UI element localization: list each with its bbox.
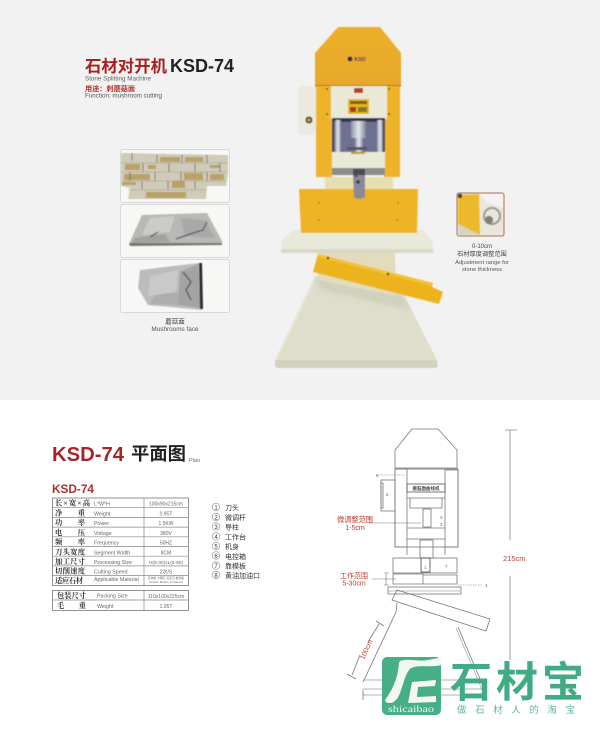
legend row 6 bbox=[212, 552, 246, 561]
table: values: 1.5KW bbox=[158, 521, 174, 527]
drawing: lower plate bbox=[393, 574, 457, 584]
inset caption: chinese: 石材厚度调整范围 bbox=[457, 250, 507, 258]
packing: english labels: Weight bbox=[97, 604, 114, 610]
legend row 1: 1 bbox=[214, 506, 218, 512]
heading: model: KSD-74 bbox=[52, 444, 125, 466]
machine: neck bbox=[318, 252, 396, 296]
packing: chinese labels: 包装尺寸 bbox=[57, 591, 86, 600]
table: values: 380V bbox=[160, 531, 172, 537]
legend row 3: 3 bbox=[214, 525, 218, 531]
sample: mushroom stone block bbox=[120, 260, 230, 312]
legend row 1: 刀头 bbox=[225, 503, 239, 512]
drawing: 90cm dimension ends bbox=[363, 690, 485, 700]
machine: head cover bbox=[315, 27, 401, 86]
machine: warning label bbox=[348, 88, 369, 114]
table: english labels: Voltage bbox=[94, 531, 112, 537]
legend row 2: 微调杆 bbox=[225, 513, 246, 522]
specification table bbox=[52, 498, 188, 586]
legend row 8: 黄油加油口 bbox=[225, 571, 260, 580]
drawing: control box bbox=[381, 480, 395, 511]
table: chinese labels: 频 率 bbox=[55, 538, 86, 546]
drawing: part numbers: 6 bbox=[386, 492, 389, 497]
drawing: table bbox=[388, 587, 461, 594]
inset caption: range: 0-10cm bbox=[472, 244, 492, 250]
drawing: base right edge bbox=[458, 627, 486, 693]
table: chinese labels: 功 率 bbox=[55, 518, 86, 527]
logo: brand name: 石材宝 bbox=[450, 659, 584, 706]
table: english labels: Cutting Speed bbox=[94, 570, 128, 576]
heading: plan english: Plan bbox=[189, 458, 200, 464]
table: values: 0.95T bbox=[160, 512, 172, 518]
table: chinese labels: 加工尺寸 bbox=[55, 557, 86, 566]
table: chinese labels: 净 重 bbox=[55, 508, 86, 518]
fine adjustment label: 微调整范围 bbox=[337, 515, 373, 524]
dotted leaders bbox=[379, 475, 483, 585]
caption: mushrooms face english: Mushrooms face bbox=[151, 326, 199, 333]
logo: slogan: 做石材人的淘宝 bbox=[457, 704, 575, 716]
machine: base bbox=[275, 276, 438, 368]
technical line drawing bbox=[347, 429, 517, 700]
legend row 5 bbox=[212, 542, 239, 551]
panel: stone samples bbox=[120, 150, 230, 333]
panel: bottom background bbox=[0, 400, 600, 733]
inset: thickness adjustment bbox=[455, 193, 509, 273]
parts legend bbox=[212, 503, 260, 580]
table: values: 50HZ bbox=[160, 540, 172, 546]
packing: chinese labels bbox=[57, 591, 86, 610]
fine adjustment range: 1-5cm bbox=[345, 525, 365, 532]
table: chinese labels: 切削速度 bbox=[55, 566, 86, 576]
working range value: 5-30cm bbox=[342, 580, 366, 588]
table: values: H(5-30)xL(5-60) bbox=[149, 560, 183, 566]
packing: values: 110x100x225cm bbox=[148, 594, 184, 600]
table: english labels bbox=[94, 502, 139, 583]
drawing: head outline bbox=[395, 429, 457, 468]
table: values: 100x90x215cm bbox=[149, 502, 183, 508]
table: english labels: Applicable Material bbox=[94, 577, 139, 583]
machine: cream upper panel bbox=[331, 86, 387, 119]
drawing: part numbers bbox=[376, 473, 488, 588]
drawing: part numbers: 8 bbox=[376, 473, 379, 478]
caption: mushrooms face chinese: 蘑菇面 bbox=[165, 316, 185, 326]
plan heading bbox=[52, 444, 200, 466]
table: chinese labels bbox=[55, 498, 91, 585]
table: chinese labels: 电 压 bbox=[55, 528, 86, 537]
dimension: 215cm line bbox=[505, 430, 517, 660]
drawing: base bottom bbox=[363, 680, 485, 695]
legend row 4: 工作台 bbox=[225, 532, 246, 542]
table: english labels: Segment Width bbox=[94, 550, 130, 556]
machine: blade bbox=[353, 169, 365, 199]
drawing: part numbers: 2 bbox=[440, 522, 443, 527]
drawing: blade bbox=[421, 558, 430, 572]
machine: cream lower panel bbox=[332, 152, 385, 168]
legend row 3: 导柱 bbox=[225, 522, 239, 532]
packing: values: 1.05T bbox=[160, 604, 172, 610]
inset photo bbox=[457, 193, 504, 236]
dimension: 100cm line bbox=[347, 621, 384, 679]
table: english labels: Processing Size bbox=[94, 560, 132, 566]
inset caption: english line 1: Adjustment range for bbox=[455, 260, 509, 266]
heading: model: KSD-74 bbox=[170, 56, 234, 76]
table: chinese labels: 长×宽×高 bbox=[55, 498, 91, 508]
table: english labels: Frequency bbox=[94, 540, 119, 546]
legend row 4 bbox=[212, 532, 246, 542]
legend row 6: 电控箱 bbox=[225, 552, 246, 561]
machine: window with piston bbox=[332, 118, 385, 152]
usage in chinese: 用途：刺蘑菇面 bbox=[85, 84, 135, 93]
table: english labels: Weight bbox=[94, 512, 111, 518]
table heading: KSD-74 bbox=[52, 482, 94, 496]
table: values bbox=[148, 502, 184, 584]
title block bbox=[85, 56, 234, 100]
table: english labels: Power bbox=[94, 521, 109, 527]
legend row 4: 4 bbox=[214, 535, 218, 541]
drawing: label plate text: 蘑菇面曲线机 bbox=[412, 485, 440, 492]
legend row 8: 8 bbox=[214, 574, 218, 580]
inset caption: english line 2: stone thickness bbox=[462, 267, 502, 273]
table: chinese labels: 刀头宽度 bbox=[55, 548, 86, 556]
machine: work table bbox=[281, 230, 433, 253]
drawing: tilted bar bbox=[392, 590, 490, 631]
packing: chinese labels: 毛 重 bbox=[57, 601, 86, 610]
heading: machine name: 石材对开机 bbox=[85, 57, 168, 76]
packing: english labels: Packing Size bbox=[97, 594, 128, 600]
packing: values bbox=[148, 594, 184, 610]
drawing: base left edge bbox=[363, 603, 397, 682]
table: values: 2次/S bbox=[160, 568, 173, 576]
usage in english: Function: mushroom cutting bbox=[85, 92, 162, 100]
table: values: 8CM bbox=[161, 550, 171, 556]
drawing: part numbers: 1 bbox=[424, 565, 427, 570]
legend row 7: 靠模板 bbox=[225, 562, 246, 570]
packing: english labels bbox=[97, 594, 128, 610]
legend row 1 bbox=[212, 503, 239, 512]
machine: side control box bbox=[298, 86, 317, 135]
panel: top background bbox=[0, 0, 600, 400]
watermark logo bbox=[382, 657, 584, 716]
legend row 8 bbox=[212, 571, 260, 580]
machine illustration bbox=[275, 27, 443, 368]
legend row 5: 机身 bbox=[225, 542, 239, 551]
packing table bbox=[52, 590, 188, 610]
heading: plan chinese: 平面图 bbox=[131, 444, 186, 464]
machine: head cover: KSD bbox=[354, 57, 366, 63]
logo: latin wordmark: shicaibao bbox=[388, 704, 435, 714]
dimension label: 215cm: 215cm bbox=[503, 554, 526, 563]
callout: working range bbox=[340, 571, 368, 588]
sample: stone wall bbox=[120, 150, 230, 202]
drawing: upper plate bbox=[393, 558, 457, 573]
legend row 3 bbox=[212, 522, 239, 532]
table: values: 花岗岩 大理石 石灰石 板岩等 bbox=[148, 576, 184, 580]
drawing: part numbers: 4 bbox=[485, 583, 488, 588]
machine: rivets bbox=[326, 88, 390, 115]
legend row 6: 6 bbox=[214, 554, 218, 560]
sample: mushroom slab bbox=[120, 204, 230, 258]
machine: yellow lower plate bbox=[299, 189, 418, 233]
callout: fine adjustment bbox=[337, 515, 373, 532]
legend row 5: 5 bbox=[214, 544, 218, 550]
legend row 2: 2 bbox=[214, 516, 218, 522]
machine: tilted yellow bar bbox=[313, 254, 443, 304]
drawing: body frame bbox=[395, 469, 458, 558]
dimension label: 90cm: 90cm bbox=[418, 693, 432, 699]
machine: column behind plate bbox=[325, 177, 393, 191]
logo: green square mark bbox=[382, 657, 441, 715]
dimension label: 100cm: 100cm bbox=[359, 639, 375, 661]
legend row 7: 7 bbox=[214, 564, 218, 570]
machine: yellow side columns bbox=[316, 86, 400, 177]
table: chinese labels: 适应石材 bbox=[55, 576, 84, 585]
legend row 7 bbox=[212, 562, 246, 570]
legend row 2 bbox=[212, 513, 246, 522]
english subtitle: Stone Splitting Machine bbox=[85, 76, 151, 82]
drawing: part numbers: 3 bbox=[440, 515, 443, 520]
table: values: Granite, Marble, Limestone bbox=[149, 580, 183, 584]
working range label: 工作范围 bbox=[340, 571, 368, 580]
callout leaders bbox=[369, 523, 421, 585]
table: english labels: L*W*H bbox=[94, 502, 110, 508]
machine: dark gap bbox=[332, 168, 385, 175]
drawing: part numbers: 7 bbox=[445, 564, 448, 569]
